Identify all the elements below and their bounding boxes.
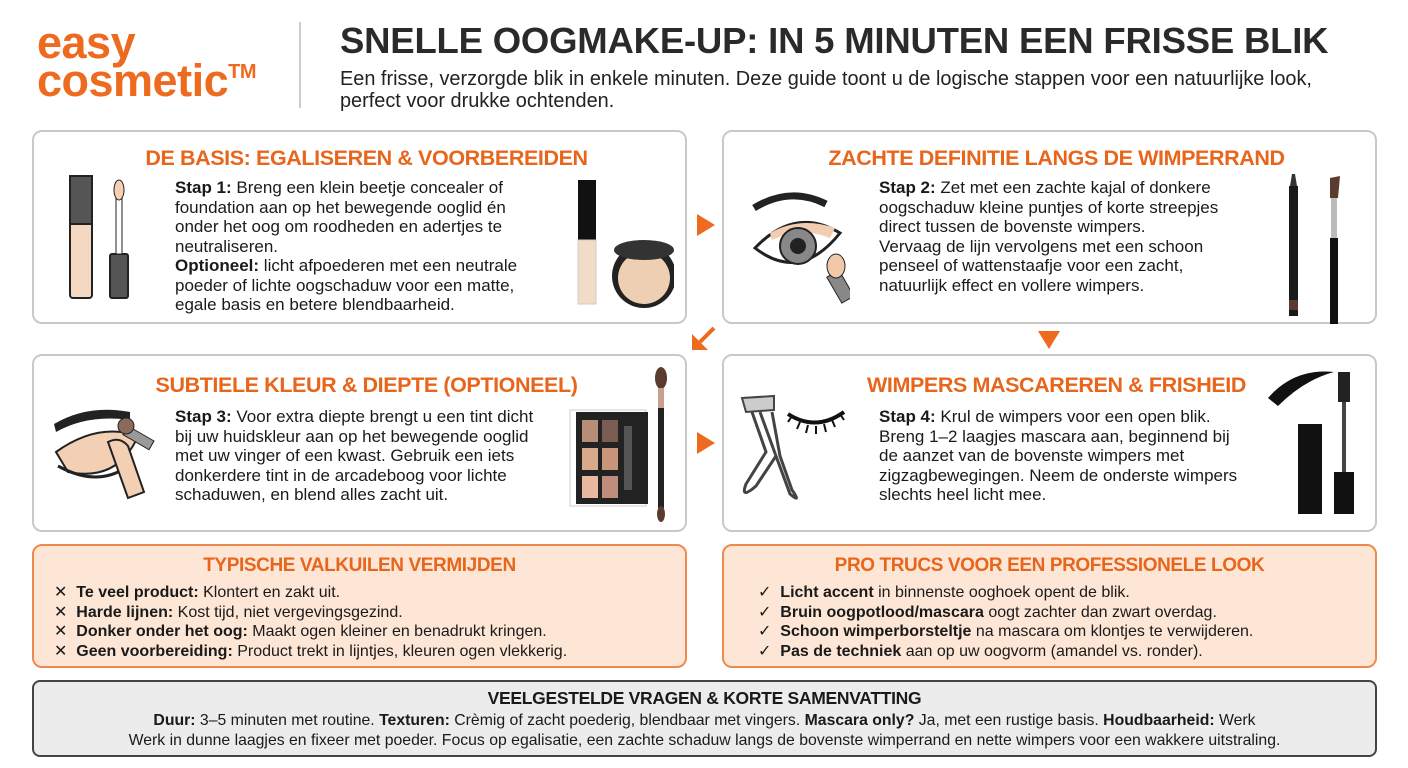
heading 4: WIMPERS MASCAREREN & FRISHEID — [867, 373, 1246, 397]
text step 4: Breng 1–2 laagjes mascara aan, beginnend bij — [879, 426, 1230, 446]
icon: concealer tube — [69, 175, 129, 299]
text step 1 — [175, 178, 517, 314]
heading FAQ: VEELGESTELDE VRAGEN & KORTE SAMENVATTING — [488, 688, 921, 708]
list pitfalls: ✕ Geen voorbereiding: Product trekt in lijntjes, kleuren ogen vlekkerig. — [54, 642, 567, 660]
text step 1: onder het oog om roodheden en adertjes te — [175, 217, 502, 236]
icon: eyelid with brush — [54, 410, 155, 500]
text step 2: direct tussen de bovenste wimpers. — [879, 217, 1145, 236]
text FAQ: Werk in dunne laagjes en fixeer met poeder. Focus op egalisatie, een zachte schaduw langs de bovenste wimperrand en nette wimpers voor een wakkere uitstraling. — [129, 732, 1280, 748]
panel: step 2 — [722, 130, 1377, 324]
text step 4: zigzagbewegingen. Neem de onderste wimpers — [879, 466, 1237, 484]
text step 3: donkerdere tint in de arcadeboog voor lichte — [175, 466, 507, 484]
heading 2: ZACHTE DEFINITIE LANGS DE WIMPERRAND — [828, 146, 1285, 170]
arrow: right 2 — [697, 432, 715, 454]
text step 1: neutraliseren. — [175, 236, 278, 256]
text step 2: Stap 2: Zet met een zachte kajal of donkere — [879, 178, 1211, 197]
arrow: diagonal — [692, 326, 716, 350]
logo — [37, 17, 256, 106]
text step 4: de aanzet van de bovenste wimpers met — [879, 446, 1184, 465]
heading 1: DE BASIS: EGALISEREN & VOORBEREIDEN — [145, 146, 588, 170]
text step 3: Stap 3: Voor extra diepte brengt u een tint dicht — [175, 407, 533, 426]
text step 1: poeder of lichte oogschaduw voor een matte, — [175, 276, 514, 294]
panel: FAQ — [32, 680, 1377, 757]
text step 1: egale basis en betere blendbaarheid. — [175, 295, 455, 314]
text step 1: Stap 1: Breng een klein beetje concealer of — [175, 178, 503, 197]
subtitle: perfect voor drukke ochtenden. — [340, 90, 614, 112]
heading pitfalls: TYPISCHE VALKUILEN VERMIJDEN — [203, 555, 516, 576]
text step 4: slechts heel licht mee. — [879, 485, 1046, 504]
icon: concealer and powder — [578, 180, 674, 308]
subtitle: Een frisse, verzorgde blik in enkele minuten. Deze guide toont u de logische stappen voor een natuurlijke look, — [340, 68, 1312, 90]
panel: pitfalls — [32, 544, 687, 668]
icon: mascara — [1268, 372, 1354, 514]
logo: cosmeticTM — [37, 55, 256, 106]
text step 1: foundation aan op het bewegende ooglid én — [175, 198, 506, 216]
logo: easy — [37, 17, 135, 68]
list pro tips — [758, 584, 1253, 660]
list pro tips: ✓ Bruin oogpotlood/mascara oogt zachter dan zwart overdag. — [758, 604, 1217, 620]
list pro tips: ✓ Schoon wimperborsteltje na mascara om klontjes te verwijderen. — [758, 623, 1253, 640]
text step 3: met uw vinger of een kwast. Gebruik een iets — [175, 446, 514, 465]
list pitfalls: ✕ Harde lijnen: Kost tijd, niet vergevingsgezind. — [54, 604, 403, 620]
list pitfalls: ✕ Donker onder het oog: Maakt ogen kleiner en benadrukt kringen. — [54, 623, 547, 640]
text step 2: penseel of wattenstaafje voor een zacht, — [879, 256, 1183, 275]
text FAQ: Duur: 3–5 minuten met routine. Texturen: Crèmig of zacht poederig, blendbaar met vingers. Mascara only? Ja, met een rustige basis. Houdbaarheid: Werk — [153, 712, 1256, 729]
title: SNELLE OOGMAKE-UP: IN 5 MINUTEN EEN FRISSE BLIK — [340, 20, 1328, 61]
text step 4: Stap 4: Krul de wimpers voor een open blik. — [879, 407, 1211, 426]
list pitfalls — [54, 584, 567, 660]
icon: pencil and brush — [1289, 174, 1340, 324]
text step 2 — [879, 178, 1218, 294]
text step 4 — [879, 407, 1237, 504]
icon: curler and lashes — [740, 394, 846, 500]
text step 2: Vervaag de lijn vervolgens met een schoon — [879, 236, 1203, 256]
panel: step 4 — [722, 354, 1377, 532]
list pro tips: ✓ Pas de techniek aan op uw oogvorm (amandel vs. ronder). — [758, 642, 1203, 660]
text step 2: oogschaduw kleine puntjes of korte streepjes — [879, 198, 1218, 216]
heading pro tips: PRO TRUCS VOOR EEN PROFESSIONELE LOOK — [835, 555, 1264, 576]
arrow: right 1 — [697, 214, 715, 236]
icon: eye with applicator — [752, 192, 850, 304]
arrow: down — [1038, 331, 1060, 349]
panel: pro tips — [722, 544, 1377, 668]
text step 3 — [175, 407, 534, 504]
list pro tips: ✓ Licht accent in binnenste ooghoek opent de blik. — [758, 584, 1130, 601]
text FAQ — [128, 712, 1280, 748]
text step 2: natuurlijk effect en vollere wimpers. — [879, 276, 1144, 294]
subtitle — [340, 68, 1312, 112]
text step 1: Optioneel: licht afpoederen met een neutrale — [175, 256, 517, 275]
panel: step 1 — [32, 130, 687, 324]
panel: step 3 — [32, 354, 687, 532]
text step 3: bij uw huidskleur aan op het bewegende ooglid — [175, 426, 528, 446]
heading 3: SUBTIELE KLEUR & DIEPTE (OPTIONEEL) — [156, 373, 578, 397]
icon: palette and brush — [570, 367, 667, 522]
list pitfalls: ✕ Te veel product: Klontert en zakt uit. — [54, 584, 340, 601]
text step 3: schaduwen, en blend alles zacht uit. — [175, 485, 448, 504]
